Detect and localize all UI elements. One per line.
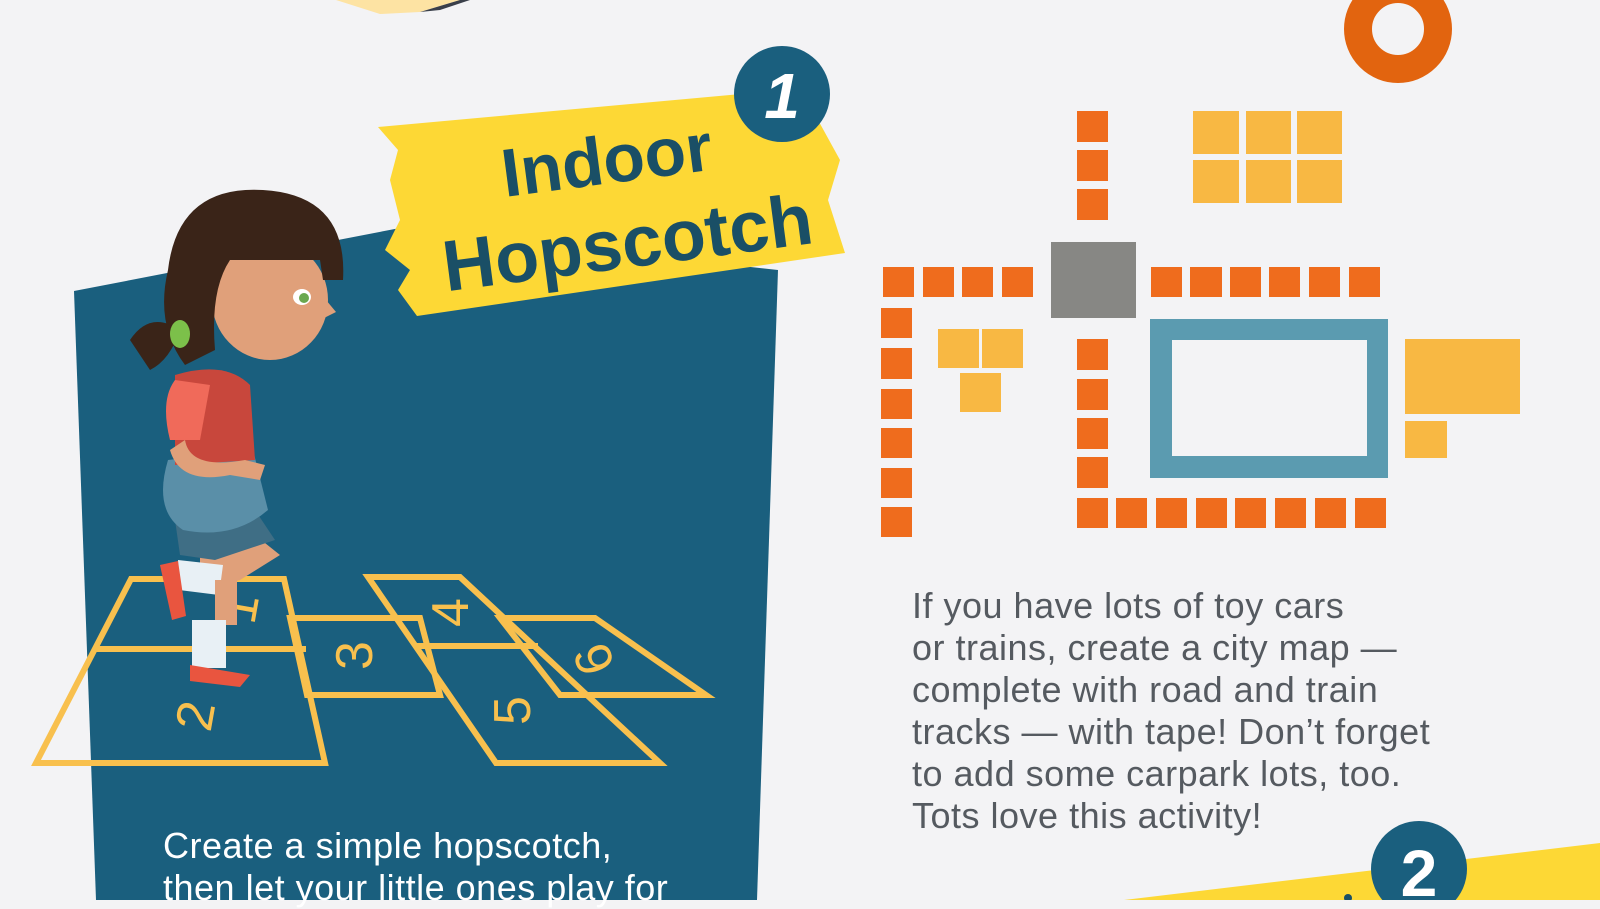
badge 1 <box>734 46 830 142</box>
city map tape illustration <box>881 111 1520 537</box>
hopscotch numbers: 2 <box>165 697 227 735</box>
text: city map description: complete with road and train <box>912 669 1378 710</box>
title: Hopscotch <box>438 179 817 307</box>
panel: blue hopscotch background <box>74 228 778 900</box>
text: city map description <box>912 585 1430 836</box>
text: city map description: or trains, create a city map — <box>912 627 1397 668</box>
orange ring top <box>1358 0 1438 69</box>
text: city map description: Tots love this activity! <box>912 795 1262 836</box>
hopscotch numbers: 4 <box>422 598 480 627</box>
top fragment object <box>336 0 470 14</box>
title <box>427 97 817 307</box>
text: hopscotch description <box>163 825 668 908</box>
text: city map description: tracks — with tape! Don’t forget <box>912 711 1430 752</box>
hopscotch numbers: 3 <box>326 641 384 670</box>
bottom right yellow band <box>1124 843 1600 900</box>
tape: title background <box>378 86 845 316</box>
text: city map description: to add some carpark lots, too. <box>912 753 1401 794</box>
girl illustration <box>130 190 343 687</box>
text: city map description: If you have lots of toy cars <box>912 585 1344 626</box>
text: hopscotch description: then let your little ones play for <box>163 867 668 908</box>
hopscotch numbers: 6 <box>563 636 627 683</box>
title: Indoor <box>497 109 717 212</box>
badge 2 <box>1371 821 1467 909</box>
badge 1: 1 <box>764 60 800 132</box>
small dark fragment <box>1344 894 1352 902</box>
hopscotch numbers: 1 <box>209 589 271 628</box>
hopscotch numbers <box>165 589 627 735</box>
hopscotch numbers: 5 <box>484 696 542 725</box>
hopscotch grid <box>36 577 706 763</box>
text: hopscotch description: Create a simple hopscotch, <box>163 825 612 866</box>
